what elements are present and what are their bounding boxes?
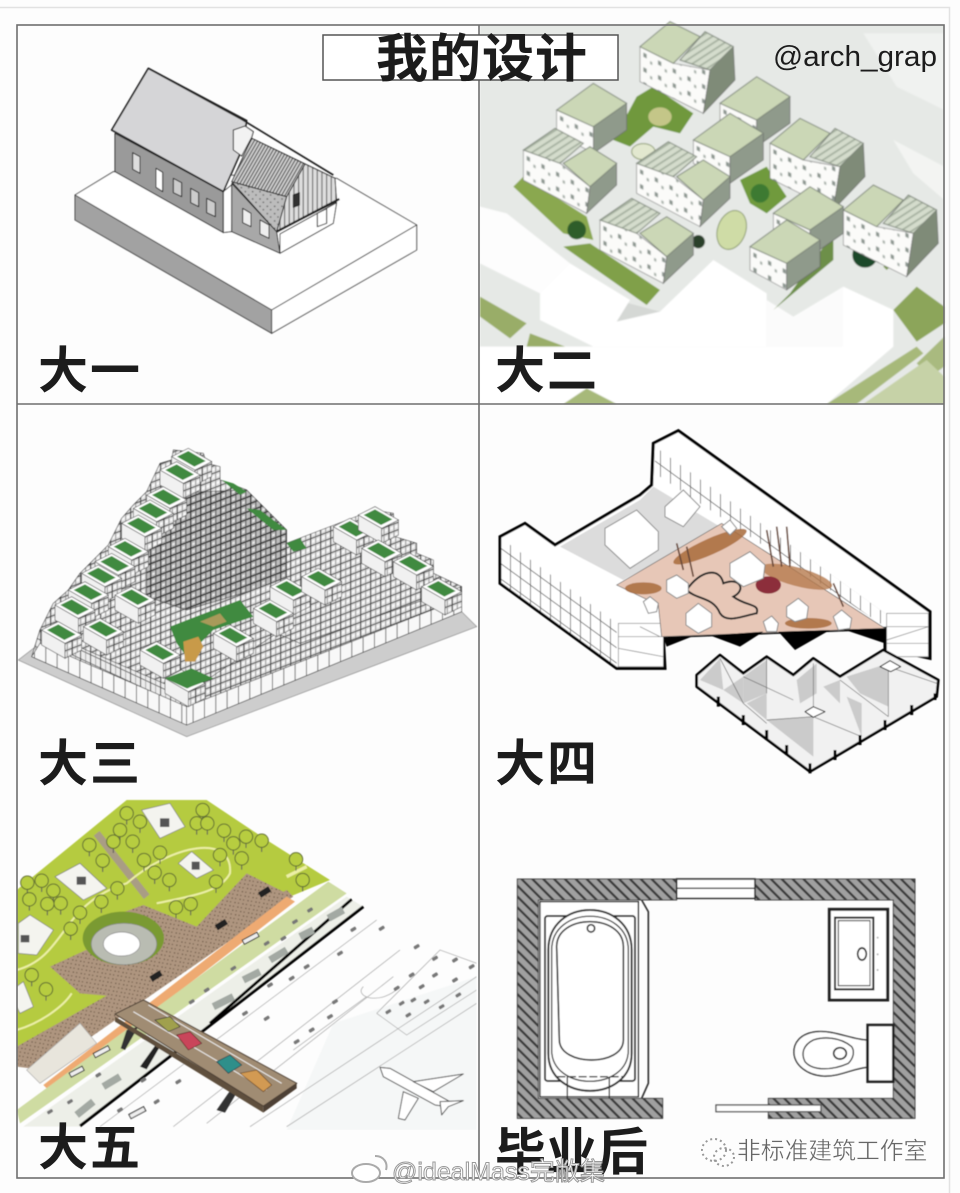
black cut wedges	[663, 628, 885, 650]
building mass	[32, 450, 462, 725]
courtyard floor	[560, 487, 885, 637]
house volume	[112, 68, 339, 253]
toilet	[794, 1025, 893, 1082]
label: year 3: 大三	[38, 736, 142, 792]
label: after graduation: 毕业后	[495, 1124, 648, 1181]
base slab	[75, 172, 417, 333]
panel: after graduation bathroom plan	[517, 879, 915, 1118]
stepped terrace boxes	[42, 448, 462, 707]
ochre court	[183, 637, 203, 662]
label: year 1: 大一	[38, 343, 142, 399]
panel: year 2 aerial housing	[480, 22, 944, 404]
pavilions in park	[17, 803, 213, 1013]
panel: year 4 axonometric cut	[500, 431, 938, 773]
door leaf	[716, 1105, 821, 1112]
facade grids	[501, 447, 928, 667]
window	[677, 879, 755, 898]
label: year 5: 大五	[38, 1120, 142, 1176]
windows	[133, 153, 140, 173]
brown plaza and circular pavilion	[17, 873, 293, 1083]
hatched walls	[517, 879, 915, 1118]
green terraces and roofs	[165, 480, 307, 688]
bathtub	[540, 900, 648, 1098]
title box: 我的设计	[376, 31, 588, 89]
label: year 2: 大二	[495, 343, 599, 399]
label: year 4: 大四	[495, 736, 599, 792]
sink	[829, 909, 888, 1000]
surrounding white blocks	[480, 33, 944, 404]
paths in park	[17, 833, 307, 1030]
trees	[21, 803, 309, 1001]
watermark: wechat account: 非标准建筑工作室	[737, 1138, 927, 1165]
watermark: weibo: @idealMass完敝集	[392, 1158, 605, 1186]
panel: year 1 house	[75, 68, 417, 333]
watermark: arch_grap: @arch_grap	[773, 41, 937, 73]
panel: year 3 stepped housing	[18, 448, 477, 737]
transit platform	[115, 1000, 297, 1113]
transport bands	[17, 882, 477, 1130]
lower pyramidal roof plan	[697, 650, 938, 773]
green park	[17, 800, 330, 1047]
green courtyards	[513, 87, 933, 310]
ground plate	[18, 612, 477, 737]
upper building volume	[500, 431, 930, 668]
white cubes	[605, 490, 852, 633]
airplane	[380, 1067, 463, 1120]
housing blocks	[523, 22, 938, 290]
panel: year 5 urban masterplan	[17, 800, 477, 1130]
